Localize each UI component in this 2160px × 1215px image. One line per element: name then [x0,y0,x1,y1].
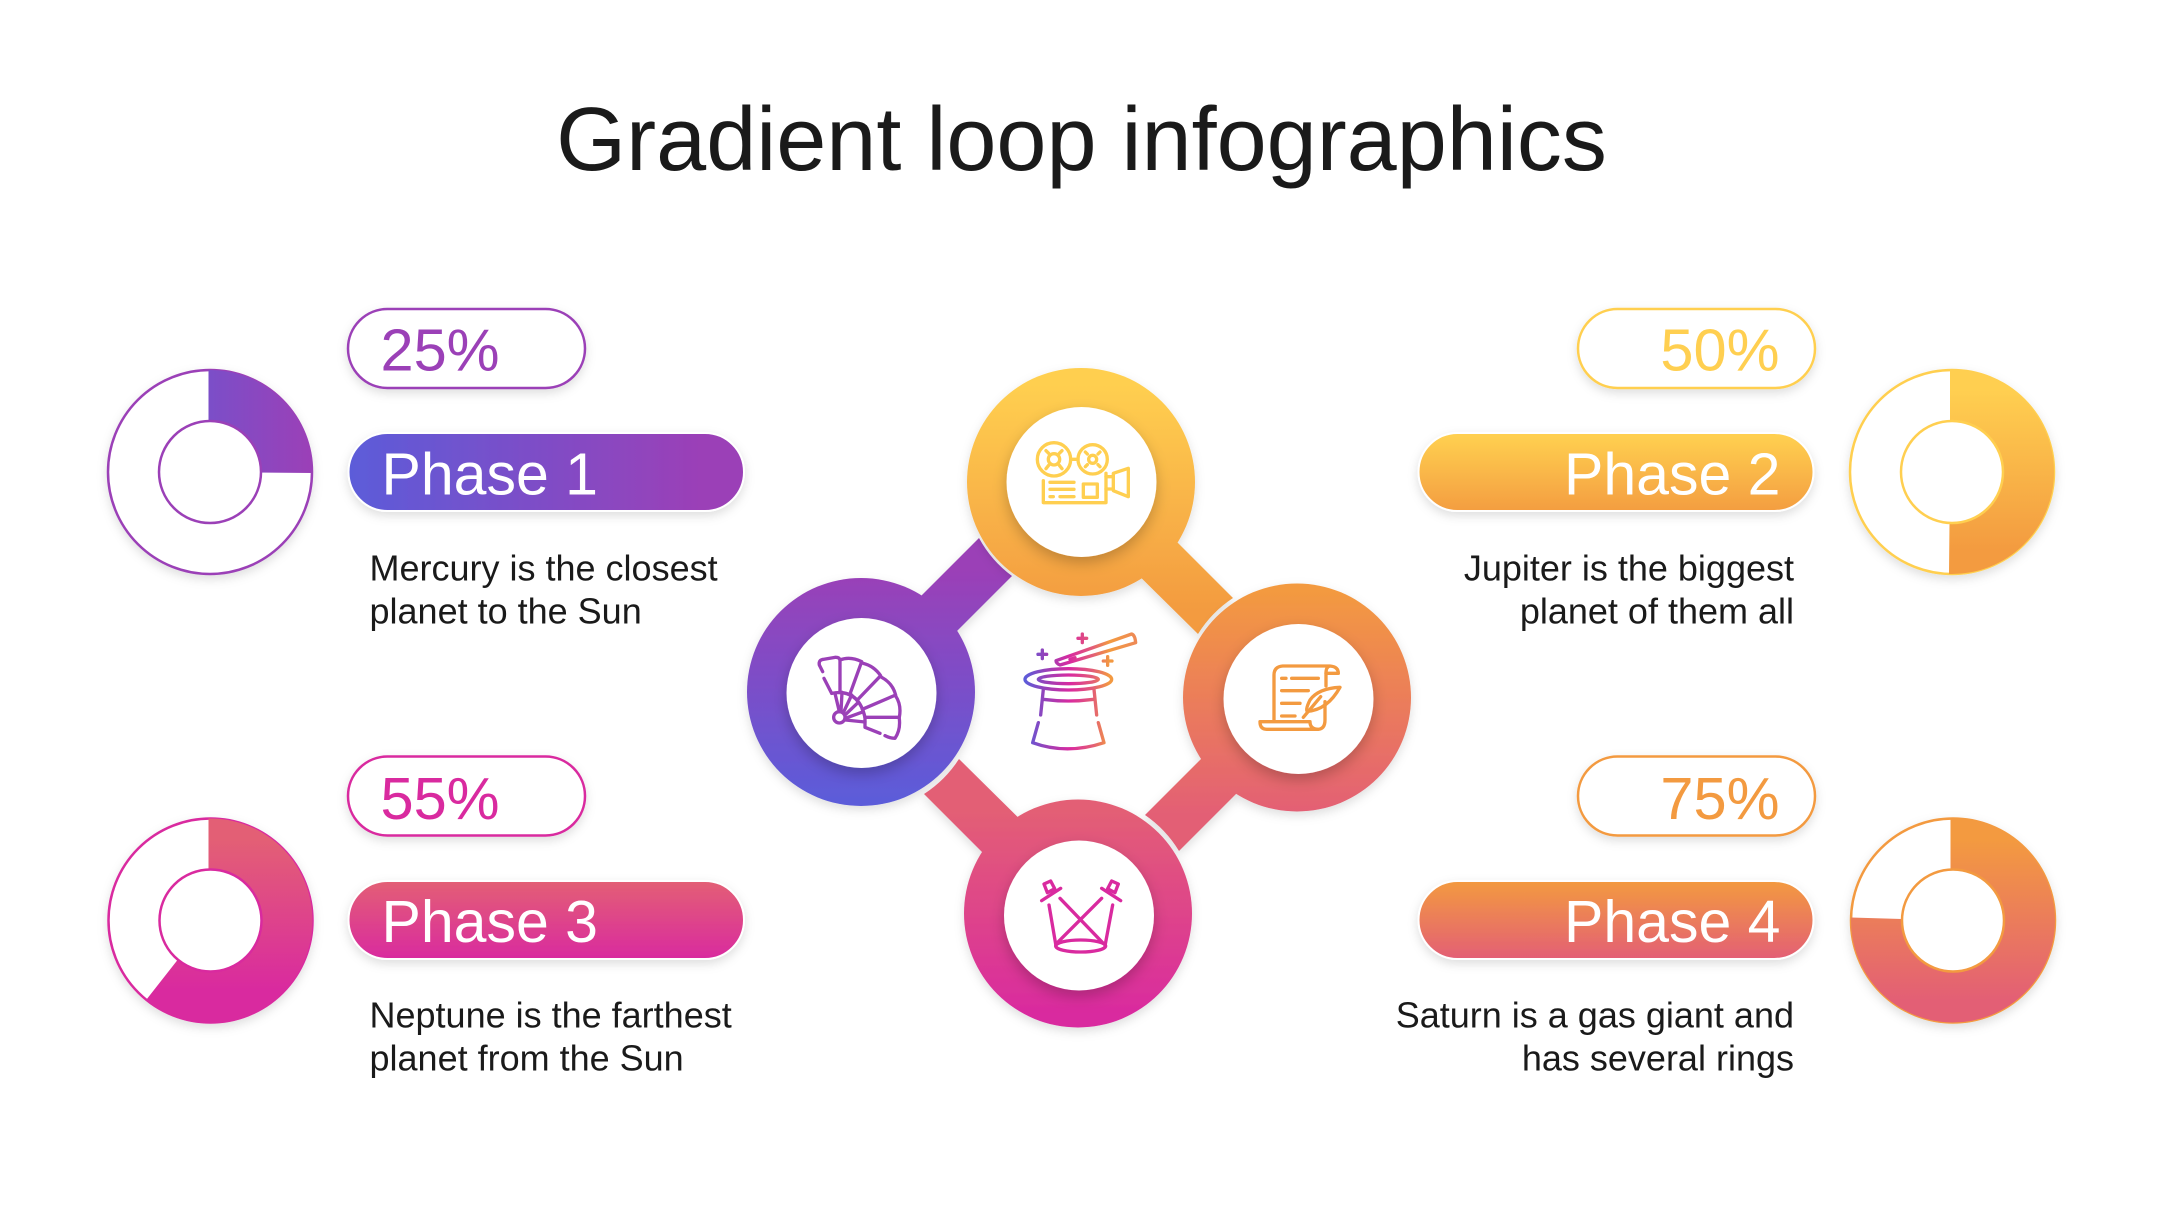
donut chart: 25% [108,370,312,574]
phase label: Phase 1 [348,433,744,511]
phase label: Phase 4 [1418,881,1814,959]
percent badge: 50%: 50% [1660,316,1780,384]
icon: magic hat and wand [1025,634,1136,749]
percent badge: 55%: 55% [380,765,500,832]
loop node: purple ring with connector [747,538,1012,806]
icon: fan [819,657,900,738]
percent badge: 75% [1578,756,1815,836]
phase label: Phase 1: Phase 1 [382,442,598,508]
panel: phase 1 [108,309,744,632]
donut chart: 50% [1850,370,2054,574]
donut chart: 75% [1851,818,2055,1022]
donut chart: 55% [108,818,312,1022]
title: Gradient loop infographics [556,90,1607,190]
description: phase 4: Saturn is a gas giant and [1396,994,1794,1036]
description: phase 3: planet from the Sun [370,1038,684,1078]
percent badge: 25% [348,309,585,388]
phase label: Phase 3 [348,881,744,959]
description: phase 1: Mercury is the closest [370,548,718,588]
phase label: Phase 3: Phase 3 [382,889,598,955]
description: phase 1: planet to the Sun [370,590,642,632]
panel: phase 3 [108,756,744,1078]
loop node: yellow ring with connector [967,368,1233,634]
phase label: Phase 4: Phase 4 [1564,889,1780,955]
loop node: orange ring with connector [1145,584,1411,851]
loop diagram [747,368,1411,1028]
loop node: magenta ring with connector [924,759,1192,1028]
phase label: Phase 2 [1418,433,1814,511]
percent badge: 55% [348,756,585,836]
phase label: Phase 2: Phase 2 [1564,442,1780,508]
panel: phase 2 [1418,309,2054,632]
icon: stage spotlights [1042,881,1121,952]
icon: scroll with quill [1260,666,1340,729]
percent badge: 25%: 25% [380,316,500,384]
description: phase 3: Neptune is the farthest [370,994,732,1036]
panel: phase 4 [1396,756,2055,1078]
percent badge: 50% [1578,309,1815,388]
icon: film projector [1037,443,1128,503]
description: phase 2: Jupiter is the biggest [1464,548,1794,588]
description: phase 4: has several rings [1522,1038,1794,1078]
percent badge: 75%: 75% [1660,765,1780,832]
description: phase 2: planet of them all [1520,590,1794,632]
